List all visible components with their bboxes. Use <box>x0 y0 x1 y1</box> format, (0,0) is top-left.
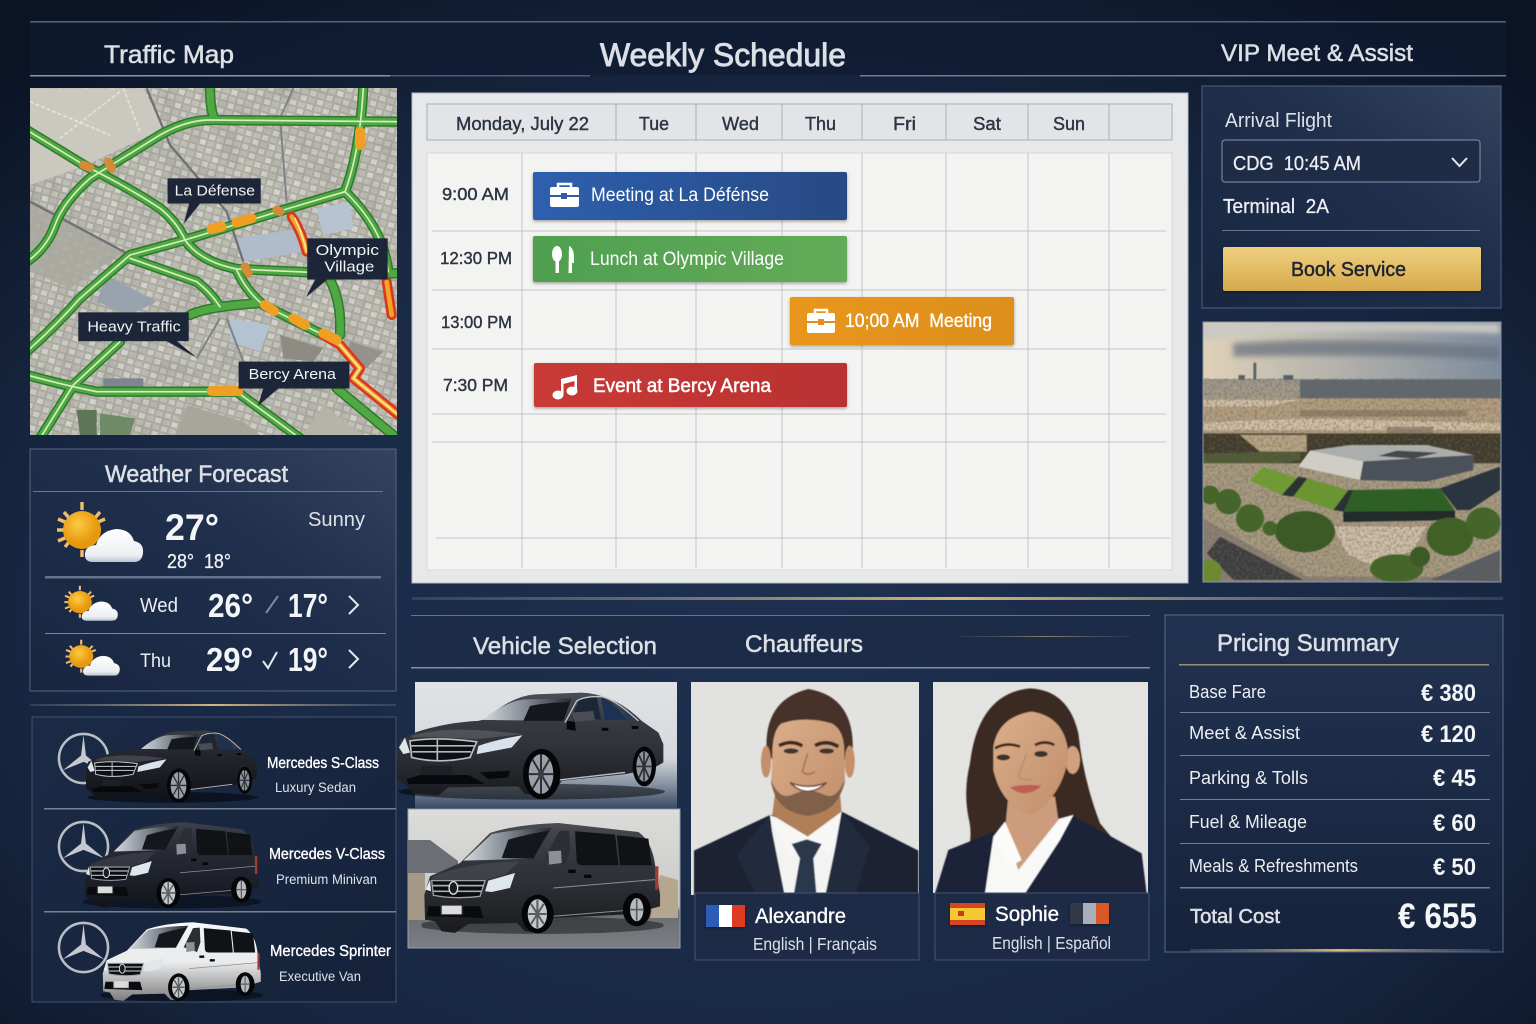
icon: briefcase <box>550 184 579 207</box>
flight dropdown: CDG 10:45 AM <box>1233 153 1361 175</box>
panel: vehicle list <box>32 717 396 1002</box>
panel: vip meet and assist <box>1202 86 1501 308</box>
title: vip meet and assist: VIP Meet & Assist <box>1221 40 1413 67</box>
forecast row: wednesday <box>64 586 358 624</box>
weekday header <box>456 113 1085 134</box>
caption panel: sophie: Sophie <box>995 903 1059 926</box>
button: book service: Book Service <box>1291 259 1406 281</box>
price row: base fare: Base Fare <box>1189 682 1266 702</box>
title: weekly schedule: Weekly Schedule <box>600 37 846 73</box>
vehicle row: v-class: Premium Minivan <box>276 872 377 887</box>
event: event at bercy arena <box>534 363 847 407</box>
forecast row: thursday <box>65 640 358 678</box>
time labels: 7:30 PM <box>443 375 508 395</box>
today's high and low: 28° 18° <box>167 551 231 573</box>
traffic roads <box>27 87 400 438</box>
weekday header: Wed <box>722 113 759 134</box>
caption panel: sophie: English | Español <box>992 933 1111 953</box>
photo: chauffeur alexandre <box>685 680 922 897</box>
price row: meet and assist: Meet & Assist <box>1189 723 1300 743</box>
button: book service <box>1223 247 1481 291</box>
title: traffic map: Traffic Map <box>104 41 234 69</box>
vehicle row: s-class <box>59 730 379 803</box>
price row: meals and refreshments: Meals & Refreshments <box>1189 856 1358 876</box>
forecast row: wednesday: 17° <box>288 587 328 624</box>
event: lunch at olympic village: Lunch at Olympic Village <box>590 249 784 270</box>
event: event at bercy arena: Event at Bercy Arena <box>593 376 771 397</box>
vehicle row: v-class: Mercedes V-Class <box>269 846 385 863</box>
price row: parking and tolls <box>1189 765 1476 792</box>
schedule grid <box>432 104 1170 568</box>
arena building <box>1250 445 1500 522</box>
price row: base fare: € 380 <box>1421 680 1476 707</box>
vehicle row: s-class: Mercedes S-Class <box>267 755 379 772</box>
weekday header: Sat <box>973 113 1001 134</box>
price row: fuel and mileage <box>1189 810 1476 837</box>
price row: meals and refreshments: € 50 <box>1433 854 1476 881</box>
map label: heavy traffic: Heavy Traffic <box>87 319 181 335</box>
event: meeting: 10;00 AM Meeting <box>845 311 992 332</box>
price row: base fare <box>1189 680 1476 707</box>
forecast row: wednesday: Wed <box>140 595 178 617</box>
price row: total cost: Total Cost <box>1190 906 1280 928</box>
map label: olympic village <box>306 238 388 297</box>
weekday header: Sun <box>1053 113 1085 134</box>
weekday header: Thu <box>805 113 836 134</box>
vehicle row: sprinter: Mercedes Sprinter <box>270 943 391 960</box>
icon: sun and cloud today <box>57 502 143 562</box>
vehicle row: sprinter <box>59 922 391 1002</box>
caption panel: alexandre: Alexandre <box>755 905 846 928</box>
heading: pricing summary: Pricing Summary <box>1217 630 1399 657</box>
woman figure <box>935 688 1147 893</box>
forecast row: thursday: 29° <box>206 641 253 678</box>
event: meeting at la defense <box>533 172 847 220</box>
map label: bercy arena: Bercy Arena <box>249 367 336 383</box>
price row: meet and assist <box>1189 721 1476 748</box>
panel: traffic map <box>27 87 400 438</box>
caption panel: sophie <box>935 893 1149 960</box>
price row: fuel and mileage: Fuel & Mileage <box>1189 812 1307 832</box>
price row: meals and refreshments <box>1189 854 1476 881</box>
flag: grey and orange <box>1070 903 1109 924</box>
heading: chauffeurs: Chauffeurs <box>745 631 863 658</box>
image: aerial view of arena <box>1198 320 1505 587</box>
icon: fork and knife <box>552 246 574 273</box>
field label: arrival flight: Arrival Flight <box>1225 110 1332 132</box>
vehicle row: s-class: Luxury Sedan <box>275 780 356 795</box>
event: meeting <box>790 297 1014 345</box>
forecast row: wednesday: 26° <box>208 587 253 624</box>
heavy traffic segments <box>292 217 398 415</box>
time labels <box>440 184 512 395</box>
man figure <box>694 689 918 897</box>
terminal text: Terminal 2A <box>1223 196 1330 218</box>
weekday header: Tue <box>639 113 669 134</box>
time labels: 9:00 AM <box>442 184 509 204</box>
panel: weekly schedule <box>412 93 1188 583</box>
photo: van <box>408 809 680 948</box>
heading: weather forecast: Weather Forecast <box>105 461 288 488</box>
weekday header: Monday, July 22 <box>456 113 589 134</box>
map label: la defense <box>168 178 261 223</box>
price row: meet and assist: € 120 <box>1421 721 1476 748</box>
price row: parking and tolls: € 45 <box>1433 765 1476 792</box>
map label: la defense: La Défense <box>175 184 255 200</box>
price row: parking and tolls: Parking & Tolls <box>1189 768 1308 788</box>
current temperature: 27° <box>165 507 219 548</box>
heading: vehicle selection: Vehicle Selection <box>473 633 657 660</box>
price row: fuel and mileage: € 60 <box>1433 810 1476 837</box>
panel: pricing summary <box>1165 615 1503 952</box>
price row: total cost <box>1190 897 1477 936</box>
map land regions <box>30 88 383 435</box>
map label: bercy arena <box>239 362 349 406</box>
photo: chauffeur sophie <box>932 680 1152 897</box>
photo: sedan <box>397 682 677 808</box>
trees <box>1198 486 1501 584</box>
price row: total cost: € 655 <box>1398 897 1477 936</box>
time labels: 12:30 PM <box>440 248 512 268</box>
condition text: Sunny <box>308 509 365 531</box>
map label: olympic village: Olympic <box>316 243 379 259</box>
icon: briefcase orange <box>807 310 835 333</box>
icon: music note <box>552 375 578 400</box>
map label: heavy traffic <box>78 312 197 358</box>
event: meeting at la defense: Meeting at La Défénse <box>591 185 769 206</box>
forecast row: thursday: 19° <box>288 641 328 678</box>
flight dropdown <box>1222 140 1480 182</box>
vehicle row: sprinter: Executive Van <box>279 969 361 984</box>
header band <box>30 21 1506 76</box>
forecast row: thursday: Thu <box>140 651 171 672</box>
time labels: 13:00 PM <box>441 312 512 332</box>
panel: vehicle and chauffeurs heading bar <box>411 615 1150 668</box>
flag: france <box>706 905 745 927</box>
caption panel: alexandre <box>695 893 919 960</box>
vehicle row: v-class <box>59 822 385 908</box>
event: lunch at olympic village <box>533 236 847 282</box>
panel: weather forecast <box>30 449 396 691</box>
weekday header: Fri <box>893 113 916 134</box>
flag: spain <box>950 903 985 925</box>
map label: olympic village: Village <box>324 260 374 276</box>
caption panel: alexandre: English | Français <box>753 934 877 954</box>
